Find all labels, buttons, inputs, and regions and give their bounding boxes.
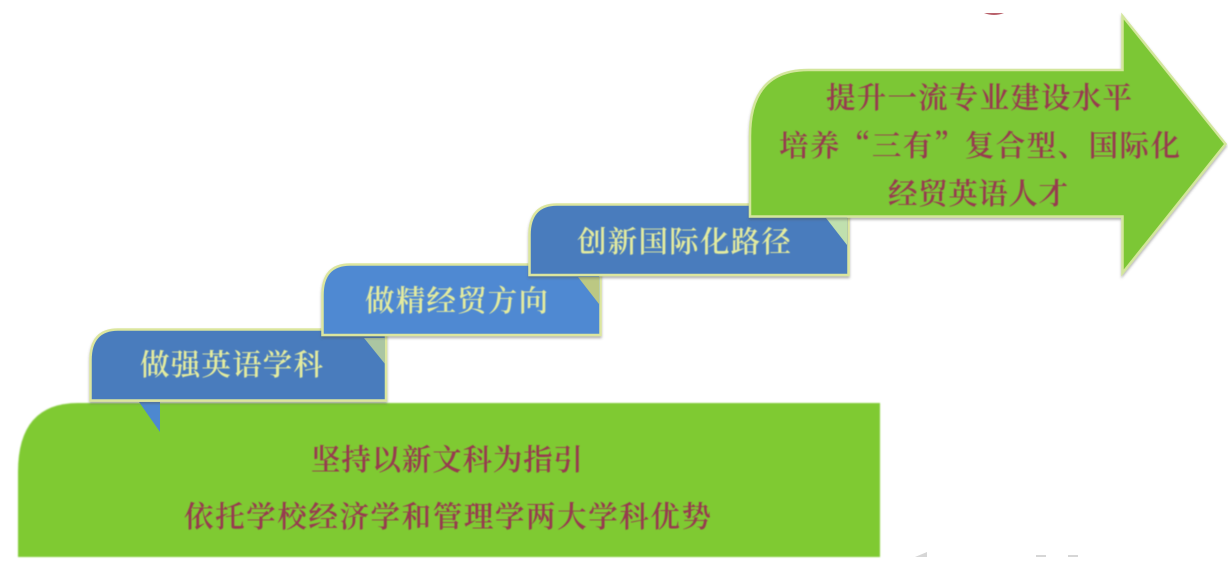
base panel: green foundation <box>18 403 880 557</box>
step 2 body <box>322 264 600 335</box>
arrow text <box>779 75 1180 213</box>
top arrow <box>750 16 1226 273</box>
base panel shape <box>18 403 880 557</box>
cropped remnant at top edge <box>984 13 1004 15</box>
cropped remnants at bottom edge <box>915 552 1078 557</box>
step 3 corner <box>826 218 847 245</box>
base panel text <box>184 437 711 536</box>
arrow text: 经贸英语人才 <box>888 171 1068 213</box>
step 3 body <box>530 204 848 275</box>
step 1 corner <box>364 338 385 364</box>
base panel text: 坚持以新文科为指引 <box>311 437 583 479</box>
step 1 lower fold <box>139 402 160 432</box>
step 2 corner <box>578 277 599 304</box>
arrow text: 提升一流专业建设水平 <box>826 75 1132 117</box>
step 1 tab <box>90 330 386 432</box>
arrow text: 培养“三有”复合型、国际化 <box>779 123 1180 165</box>
step 3 label: 创新国际化路径 <box>577 219 791 261</box>
step 1 body <box>90 330 386 400</box>
base panel text: 依托学校经济学和管理学两大学科优势 <box>184 494 711 536</box>
arrow shape <box>750 16 1226 273</box>
step 2 tab <box>322 264 600 335</box>
step 1 label: 做强英语学科 <box>140 342 323 384</box>
step 3 tab <box>530 204 848 275</box>
step 2 label: 做精经贸方向 <box>365 278 548 320</box>
